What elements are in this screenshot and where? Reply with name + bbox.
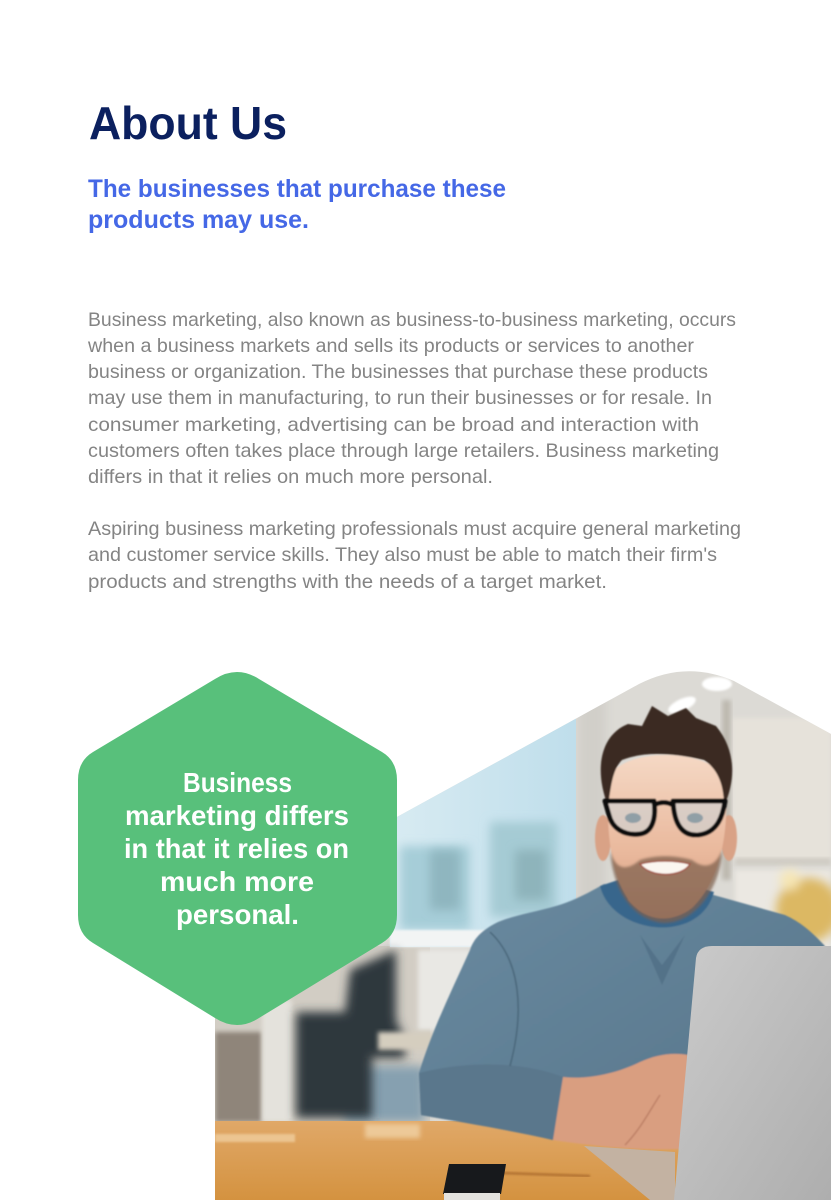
mouth: [640, 861, 690, 874]
subtitle: [88, 175, 506, 234]
sleeve cuff: [419, 1065, 550, 1140]
office background: [215, 671, 831, 1121]
face: [608, 755, 726, 918]
window: [390, 715, 585, 947]
phone: [443, 1164, 506, 1200]
body paragraph 1: [87, 309, 736, 488]
ears: [595, 815, 611, 861]
callout text: marketing differs: [125, 800, 349, 831]
body paragraph 1: differs in that it relies on much more personal.: [88, 466, 493, 488]
body paragraph 1: business or organization. The businesses that purchase these products: [88, 361, 708, 383]
body paragraph 1: Business marketing, also known as business-to-business marketing, occurs: [88, 309, 736, 331]
sweater collar: [600, 880, 714, 927]
hand: [553, 1054, 688, 1149]
body paragraph 1: may use them in manufacturing, to run their businesses or for resale. In: [88, 387, 712, 409]
body paragraph 2: [88, 518, 741, 593]
stubble beard: [610, 850, 722, 923]
body paragraph 1: consumer marketing, advertising can be broad and interaction with: [88, 414, 699, 436]
callout: green hexagon: [78, 672, 397, 1025]
neck: [628, 899, 631, 904]
callout text: [124, 767, 349, 930]
callout text: much more: [160, 866, 314, 897]
body paragraph 2: Aspiring business marketing professionals must acquire general marketing: [88, 518, 741, 540]
body paragraph 1: when a business markets and sells its products or services to another: [87, 335, 694, 357]
title: About Us: [89, 97, 287, 149]
table: [215, 1121, 679, 1200]
glasses: [605, 801, 725, 835]
blurred chair and office furniture: [215, 950, 470, 1122]
callout text: personal.: [176, 899, 299, 930]
body paragraph 1: customers often takes place through large retailers. Business marketing: [88, 440, 719, 462]
callout text: Business: [183, 767, 292, 798]
body paragraph 2: products and strengths with the needs of a target market.: [88, 571, 607, 593]
man: [419, 706, 825, 1149]
subtitle: The businesses that purchase these: [88, 175, 506, 203]
gold decoration: [776, 870, 831, 942]
body paragraph 2: and customer service skills. They also must be able to match their firm's: [88, 544, 717, 566]
photo: smiling man with glasses at a laptop: [215, 660, 831, 1200]
laptop: [584, 946, 831, 1200]
eyes: [625, 813, 703, 823]
subtitle: products may use.: [88, 206, 309, 234]
sweater: [418, 884, 826, 1078]
callout text: in that it relies on: [124, 833, 349, 864]
hair: [601, 706, 732, 806]
